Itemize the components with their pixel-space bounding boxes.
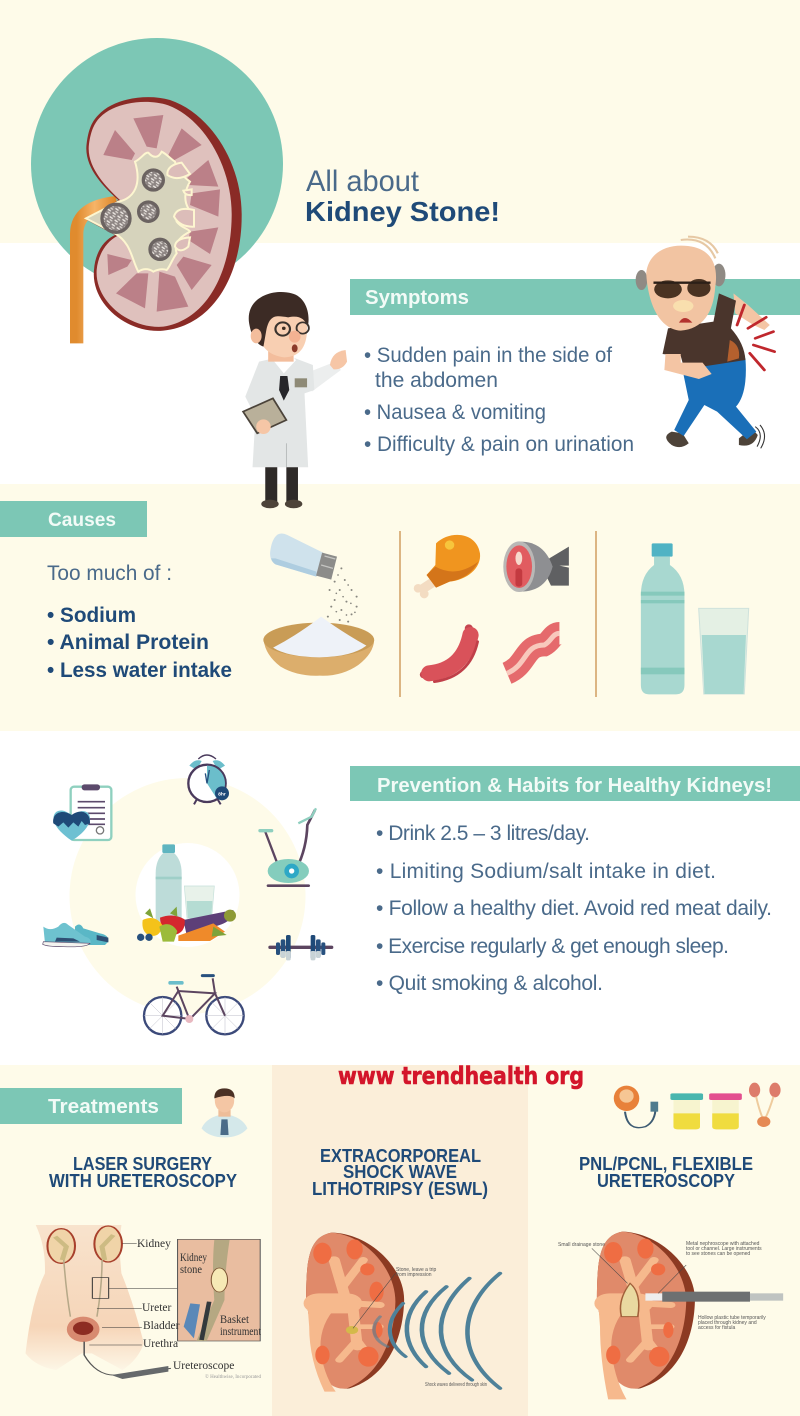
icon: alarm clock [188, 755, 229, 804]
diagram labels [137, 1238, 262, 1380]
icon ring: healthy habits [70, 778, 306, 1014]
icon group: catheter and urine samples [614, 1083, 781, 1129]
prevention list [376, 822, 772, 995]
treatment titles: WITH URETEROSCOPY [49, 1171, 237, 1191]
prevention heading [350, 766, 800, 801]
symptoms list: • Sudden pain in the side of [364, 344, 612, 367]
ureter [77, 203, 117, 343]
icon: water bottle and glass [641, 543, 749, 694]
icon: fish steak [503, 541, 569, 592]
icon: surgeon bust [202, 1088, 247, 1137]
diagram drawing [26, 1225, 260, 1379]
kidney outer wall [86, 97, 242, 331]
shock wave callouts [396, 1267, 487, 1388]
diagram labels: stone [180, 1264, 202, 1276]
icon: kidney cross-section with stones [77, 97, 242, 343]
shock wave callouts: from impression [396, 1272, 432, 1278]
diagram labels: Basket [220, 1314, 250, 1326]
icon: dumbbell [268, 935, 333, 960]
PNL callouts [558, 1241, 766, 1331]
icon: sausage [420, 624, 478, 682]
icon group: bottle, glass and food [137, 844, 236, 942]
diagram labels: Ureter [142, 1302, 172, 1314]
diagram labels: Kidney [180, 1252, 207, 1264]
icon: chicken leg [414, 535, 480, 598]
kidney with nephroscope [592, 1232, 783, 1399]
calyx cups [167, 163, 194, 250]
panel: treatments [0, 1088, 753, 1199]
treatment titles: PNL/PCNL, FLEXIBLE [579, 1154, 753, 1174]
icon: exercise bike [258, 808, 316, 887]
diagram labels: Bladder [143, 1320, 180, 1332]
kidney with shock waves [306, 1233, 500, 1392]
icon: salt shaker and bowl [263, 533, 374, 676]
causes text: Too much of : [47, 562, 172, 585]
treatments heading: Treatments [48, 1096, 159, 1118]
treatment titles: LITHOTRIPSY (ESWL) [312, 1179, 488, 1199]
illustration: laser surgery with ureteroscopy [26, 1225, 262, 1380]
symptoms list [364, 344, 634, 456]
treatments heading [0, 1088, 182, 1124]
symptoms list: the abdomen [375, 369, 498, 392]
diagram labels: instrument [220, 1326, 262, 1338]
PNL callouts: to see stones can be opened [686, 1251, 750, 1257]
PNL callouts: placed through kidney and [698, 1320, 757, 1326]
icon: sports shoes [43, 923, 108, 947]
diagram labels: Urethra [143, 1338, 178, 1350]
panel: symptoms [350, 279, 800, 456]
watermark: www trendhealth org [338, 1062, 584, 1090]
teal circle behind kidney [31, 38, 283, 290]
PNL callouts: access for fistula [698, 1325, 735, 1331]
prevention heading: Prevention & Habits for Healthy Kidneys! [377, 775, 772, 797]
diagram labels: Kidney [137, 1238, 171, 1250]
pain marks [737, 305, 775, 370]
PNL callouts: tool or channel. Large instruments [686, 1246, 762, 1252]
causes text: • Sodium [47, 604, 136, 627]
prevention list: • Drink 2.5 – 3 litres/day. [376, 822, 590, 845]
prevention list: • Follow a healthy diet. Avoid red meat daily. [376, 897, 772, 920]
panel: prevention [350, 766, 800, 995]
PNL callouts: Hollow plastic tube temporarily [698, 1315, 766, 1321]
shock wave callouts: Shock waves delivered through skin [425, 1382, 487, 1388]
causes text: • Less water intake [47, 659, 232, 682]
icon: doctor [243, 292, 347, 508]
prevention list: • Quit smoking & alcohol. [376, 972, 603, 995]
icon: heart report [53, 784, 111, 841]
causes heading [0, 501, 147, 537]
symptoms heading [350, 279, 800, 315]
icon: bacon [507, 633, 559, 673]
diagram labels: © Healthwise, Incorporated [205, 1373, 261, 1380]
prevention list: • Exercise regularly & get enough sleep. [376, 935, 729, 958]
title [305, 165, 500, 227]
treatment titles: EXTRACORPOREAL [320, 1146, 481, 1166]
PNL callouts: Small drainage stone [558, 1242, 605, 1248]
causes heading: Causes [48, 510, 116, 531]
icon: old man in pain [636, 237, 775, 448]
causes text: • Animal Protein [47, 631, 209, 654]
icon: bicycle [144, 976, 244, 1034]
symptoms heading: Symptoms [365, 287, 469, 309]
treatment titles: URETEROSCOPY [597, 1171, 735, 1191]
renal pelvis [86, 152, 190, 272]
prevention list: • Limiting Sodium/salt intake in diet. [376, 860, 716, 883]
title: All about [306, 165, 420, 198]
illustration: PNL flexible ureteroscopy [558, 1232, 783, 1399]
icon: alarm clock: 8hr [218, 791, 226, 797]
illustration: shock wave lithotripsy [306, 1233, 500, 1392]
kidney inner tissue [88, 102, 232, 327]
panel: causes [0, 501, 597, 697]
treatment titles: SHOCK WAVE [343, 1162, 457, 1182]
treatment titles [49, 1146, 753, 1199]
symptoms list: • Nausea & vomiting [364, 401, 546, 424]
causes text [47, 562, 232, 682]
diagram labels: Ureteroscope [173, 1360, 234, 1372]
pyramids [103, 115, 220, 312]
treatment titles: LASER SURGERY [73, 1154, 212, 1174]
shock wave callouts: Stone, leave a trip [396, 1267, 437, 1273]
title: Kidney Stone! [305, 196, 500, 227]
symptoms list: • Difficulty & pain on urination [364, 433, 634, 456]
stones [102, 170, 170, 259]
PNL callouts: Metal nephroscope with attached [686, 1241, 760, 1247]
